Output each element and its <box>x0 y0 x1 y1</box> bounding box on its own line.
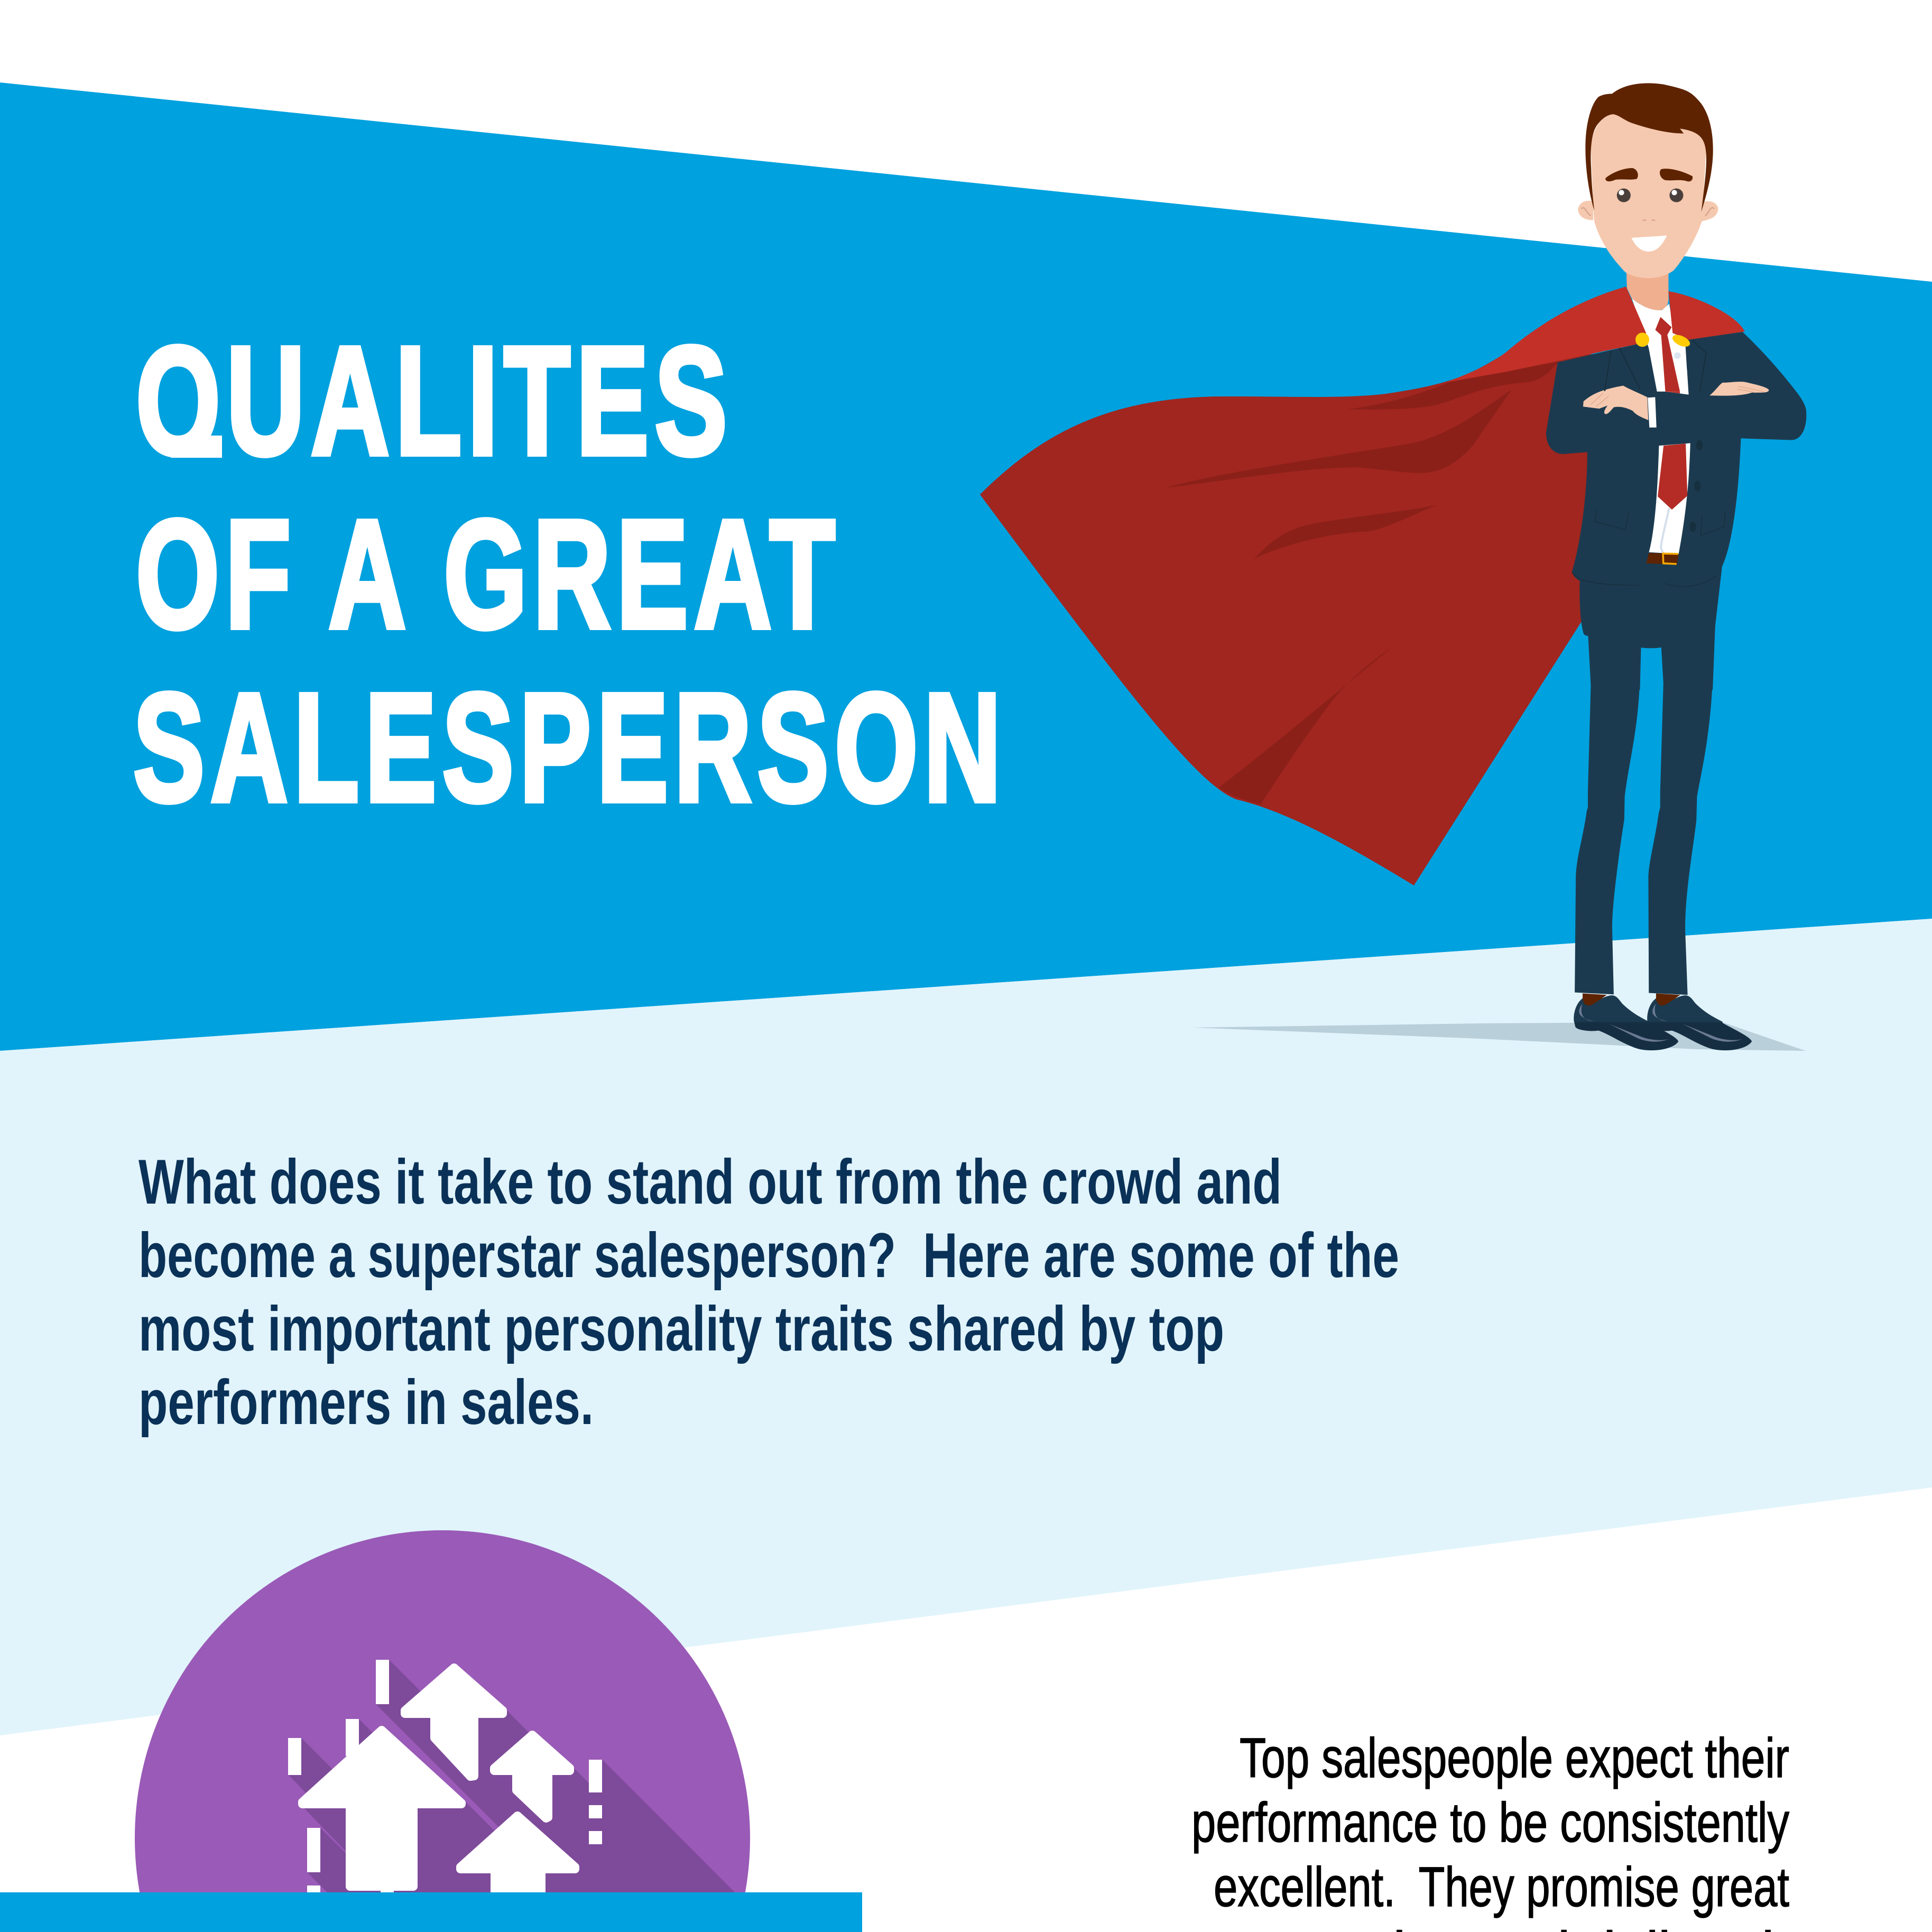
gold clasp <box>1635 332 1692 349</box>
intro text: become a superstar salesperson? <box>138 1220 896 1291</box>
collar shirt <box>1632 299 1688 392</box>
white dashes <box>288 1660 602 1892</box>
right text block: Top salespeople expect their <box>1240 1727 1789 1789</box>
head and collar <box>1447 83 1745 392</box>
smile <box>1631 235 1667 252</box>
intro text: Here are some of the <box>923 1220 1399 1291</box>
purple disc <box>135 1530 750 1932</box>
right hand <box>1709 382 1769 396</box>
cape <box>980 354 1653 885</box>
Q tail correction <box>159 436 230 497</box>
tie knot <box>1656 317 1680 392</box>
illustration: superhero salesperson <box>980 83 1806 1050</box>
legs <box>1574 672 1752 1050</box>
torso, arms and upper legs <box>1546 332 1806 690</box>
lower shirt and tie <box>1649 443 1690 554</box>
lapel lines <box>1605 340 1706 391</box>
right text block <box>1191 1727 1789 1932</box>
title: QUALITES <box>136 315 733 487</box>
intro text <box>138 1147 1399 1438</box>
eyebrows <box>1605 168 1693 181</box>
eyes <box>1617 188 1684 202</box>
nose <box>1642 219 1656 221</box>
jacket buttons <box>1689 440 1703 532</box>
right text block: performance to be consistently <box>1191 1791 1789 1854</box>
title: SALESPERSON <box>133 661 1007 834</box>
left hand <box>1583 386 1648 420</box>
hair <box>1585 83 1713 212</box>
face <box>1591 110 1706 278</box>
belt and buckle <box>1646 553 1679 565</box>
cape shoulder right <box>1668 291 1745 340</box>
jacket pocket and hem lines <box>1572 509 1725 587</box>
title: OF A GREAT <box>136 488 841 660</box>
cape fold <box>1254 505 1436 559</box>
intro text: most important personality traits shared by top <box>138 1293 1224 1364</box>
ears <box>1578 201 1718 221</box>
icon: purple circle with rising arrows <box>135 1530 750 1932</box>
cape fold <box>1219 648 1392 805</box>
cape fold <box>1166 390 1512 488</box>
shirt button <box>1674 352 1681 359</box>
blue ribbon bar <box>0 1892 862 1932</box>
neck <box>1626 272 1668 310</box>
intro text: performers in sales. <box>138 1367 594 1438</box>
white arrows <box>302 1668 575 1892</box>
cuff <box>1648 397 1657 428</box>
cape shoulder <box>1447 286 1646 382</box>
left shoe <box>1574 993 1678 1050</box>
right shoe <box>1647 993 1752 1050</box>
intro text: What does it take to stand out from the crowd and <box>138 1147 1282 1217</box>
long shadows <box>288 1660 735 1892</box>
panel: light blue intro band <box>0 919 1932 1735</box>
cape fold <box>1348 362 1558 410</box>
ground shadow <box>1193 1022 1806 1051</box>
upper shirt and tie <box>1654 369 1689 395</box>
panel: blue header band <box>0 82 1932 1051</box>
title <box>133 315 1007 834</box>
